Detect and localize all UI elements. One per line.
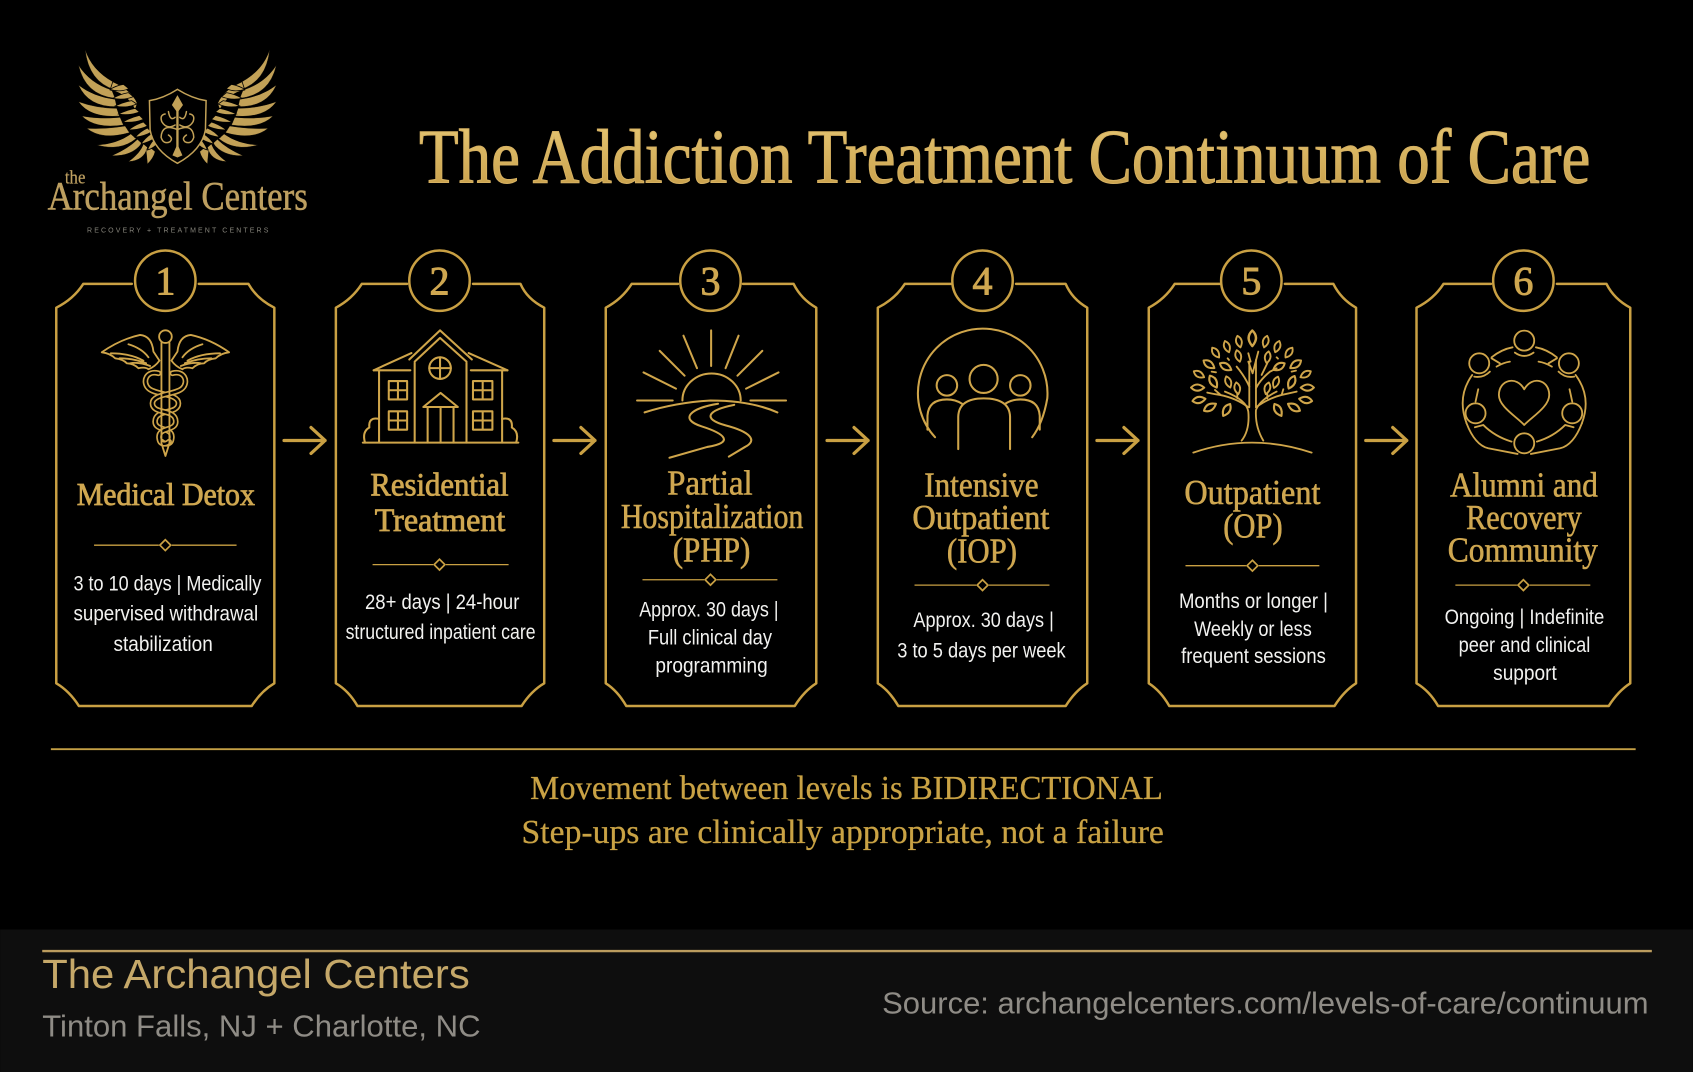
heading bbox=[912, 467, 1050, 570]
heading bbox=[1184, 474, 1321, 546]
logo: The Archangel Centers bbox=[48, 49, 308, 235]
description: Months or longer | bbox=[1179, 590, 1328, 613]
panel: step 6 Alumni and Recovery Community bbox=[1417, 250, 1630, 706]
icon: shield bbox=[149, 89, 206, 163]
description: frequent sessions bbox=[1181, 645, 1326, 668]
arrow 2 to 3 bbox=[554, 428, 595, 453]
description: Approx. 30 days | bbox=[913, 609, 1054, 632]
description: peer and clinical bbox=[1459, 634, 1590, 657]
description: Ongoing | Indefinite bbox=[1445, 606, 1604, 629]
heading: Residential bbox=[370, 468, 509, 504]
logo wordmark small: the bbox=[65, 168, 85, 189]
icon: house bbox=[363, 330, 518, 443]
footer locations: Tinton Falls, NJ + Charlotte, NC bbox=[42, 1010, 481, 1043]
card frame bbox=[606, 284, 816, 706]
callout: bidirectional movement bbox=[522, 770, 1164, 851]
callout: bidirectional movement: Step-ups are clinically appropriate, not a failure bbox=[522, 814, 1164, 851]
description: stabilization bbox=[113, 633, 213, 656]
heading bbox=[621, 464, 803, 569]
step number 6 bbox=[1493, 250, 1554, 311]
description: supervised withdrawal bbox=[74, 603, 258, 626]
description bbox=[1179, 590, 1328, 668]
divider bbox=[94, 540, 237, 551]
step number 3: 3 bbox=[700, 259, 720, 304]
icon: tree bbox=[1191, 330, 1314, 453]
description: programming bbox=[655, 655, 768, 678]
step number 5: 5 bbox=[1241, 259, 1261, 304]
heading: (IOP) bbox=[947, 532, 1017, 570]
step number 4: 4 bbox=[973, 259, 993, 304]
heading: (PHP) bbox=[673, 531, 750, 569]
callout: bidirectional movement: Movement between levels is BIDIRECTIONAL bbox=[530, 770, 1163, 807]
arrow 5 to 6 bbox=[1366, 428, 1407, 453]
heading: Hospitalization bbox=[621, 498, 803, 536]
step number 6: 6 bbox=[1513, 259, 1533, 304]
card frame bbox=[1417, 284, 1630, 706]
step number 5 bbox=[1221, 250, 1282, 311]
card frame bbox=[878, 284, 1087, 706]
description bbox=[74, 573, 262, 656]
divider bbox=[915, 580, 1049, 591]
arrow 4 to 5 bbox=[1097, 428, 1138, 453]
card frame bbox=[1149, 284, 1356, 706]
logo wordmark: Archangel Centers bbox=[48, 173, 308, 218]
icon: group of people bbox=[918, 329, 1047, 449]
logo tagline: RECOVERY + TREATMENT CENTERS bbox=[87, 228, 269, 235]
description: 3 to 5 days per week bbox=[897, 639, 1066, 662]
heading: Intensive bbox=[924, 467, 1039, 505]
heading: (OP) bbox=[1223, 508, 1283, 546]
divider bbox=[1455, 580, 1590, 591]
panel: step 2 Residential Treatment bbox=[336, 250, 544, 706]
panel: step 3 Partial Hospitalization bbox=[606, 250, 816, 706]
icon: sunrise river bbox=[637, 330, 786, 458]
card frame bbox=[56, 284, 274, 706]
icon: caduceus bbox=[102, 330, 229, 456]
footer source: Source: archangelcenters.com/levels-of-care/continuum bbox=[882, 988, 1649, 1021]
icon: right wing bbox=[198, 49, 276, 164]
arrow 3 to 4 bbox=[827, 428, 868, 453]
step number 2: 2 bbox=[430, 259, 449, 304]
heading: Community bbox=[1448, 531, 1599, 569]
card frame bbox=[336, 284, 544, 706]
description bbox=[1445, 606, 1604, 685]
heading: Treatment bbox=[375, 503, 505, 539]
description: Weekly or less bbox=[1194, 618, 1312, 641]
heading: Medical Detox bbox=[77, 477, 255, 512]
description: support bbox=[1493, 662, 1557, 685]
step number 1 bbox=[135, 250, 196, 311]
description bbox=[346, 591, 536, 644]
description: structured inpatient care bbox=[346, 621, 536, 644]
panel: step 5 Outpatient bbox=[1149, 250, 1356, 706]
divider bbox=[373, 559, 509, 570]
step number 3 bbox=[680, 250, 741, 311]
footer organisation name: The Archangel Centers bbox=[42, 951, 470, 997]
heading bbox=[1448, 467, 1599, 569]
description: Full clinical day bbox=[648, 626, 772, 649]
description: 3 to 10 days | Medically bbox=[74, 573, 262, 596]
footer band bbox=[0, 929, 1693, 1072]
panel: step 4 Intensive Outpatient bbox=[878, 250, 1087, 706]
icon: community circle with heart bbox=[1463, 331, 1586, 454]
heading: Alumni and bbox=[1450, 467, 1598, 505]
heading: Partial bbox=[667, 464, 753, 502]
divider bbox=[642, 574, 777, 585]
icon: left wing bbox=[78, 49, 157, 164]
arrow 1 to 2 bbox=[284, 428, 325, 453]
heading: Outpatient bbox=[1184, 474, 1321, 512]
panel: step 1 Medical Detox bbox=[56, 250, 274, 706]
heading: Recovery bbox=[1466, 499, 1582, 537]
description bbox=[897, 609, 1066, 662]
heading: Outpatient bbox=[912, 499, 1050, 537]
description: 28+ days | 24-hour bbox=[365, 591, 519, 614]
step number 1: 1 bbox=[155, 259, 175, 304]
divider bbox=[1185, 560, 1319, 571]
step number 4 bbox=[952, 250, 1013, 311]
step number 2 bbox=[409, 250, 470, 311]
description: Approx. 30 days | bbox=[639, 598, 778, 621]
icon: wings and shield bbox=[78, 49, 276, 164]
description bbox=[639, 598, 778, 678]
heading bbox=[370, 468, 509, 539]
